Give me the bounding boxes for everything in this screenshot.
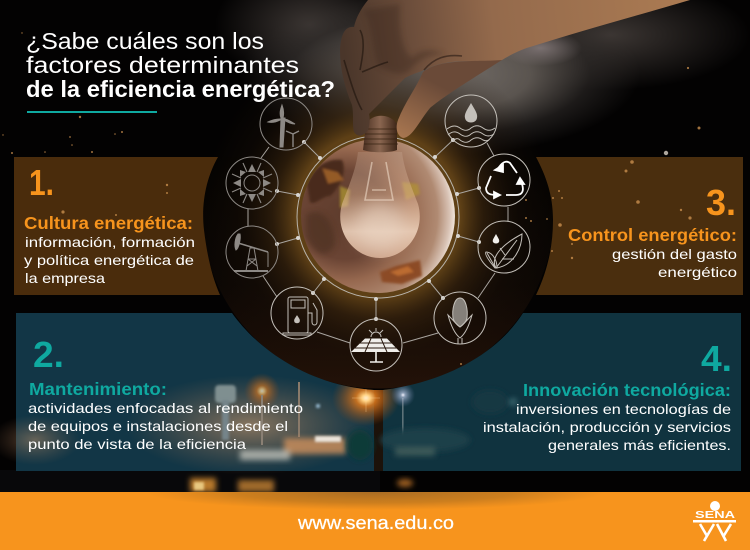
screw base bbox=[363, 116, 397, 152]
text: control energético: gestión del gasto bbox=[612, 246, 737, 262]
hand bbox=[340, 0, 690, 138]
bulb glass bbox=[340, 152, 420, 258]
panel 4 photo lights bbox=[380, 390, 517, 456]
heading: mantenimiento: Mantenimiento: bbox=[29, 379, 167, 399]
logo: SENA: SENA bbox=[695, 510, 735, 521]
heading: cultura energética: Cultura energética: bbox=[24, 213, 193, 233]
footer band bbox=[0, 492, 750, 550]
night lights photo bbox=[0, 390, 413, 492]
panel 4 bbox=[380, 313, 741, 471]
logo: SENA bbox=[693, 501, 736, 541]
number 4: 4. bbox=[701, 338, 732, 379]
text: cultura energética: y política energética de bbox=[24, 252, 194, 268]
icon: leaf and drop bbox=[478, 221, 530, 273]
text: innovación tecnológica: inversiones en tecnologías de bbox=[516, 401, 731, 417]
title bbox=[26, 28, 335, 102]
text: cultura energética bbox=[24, 234, 195, 286]
icon: oil pumpjack bbox=[226, 226, 278, 278]
panel 3 bbox=[536, 157, 743, 295]
icon: recycle arrows bbox=[478, 154, 530, 206]
icon: water drop and waves bbox=[445, 95, 497, 147]
icon: sun bbox=[226, 157, 278, 209]
globe with light bulb bbox=[297, 116, 459, 298]
continents bbox=[306, 160, 422, 284]
text: cultura energética: la empresa bbox=[25, 270, 105, 286]
icon: corn bbox=[434, 292, 486, 344]
outer ring bbox=[297, 136, 459, 298]
text: mantenimiento: de equipos e instalaciones desde el bbox=[28, 418, 288, 434]
arm and palm bbox=[340, 0, 690, 136]
text: innovación tecnológica: instalación, producción y servicios bbox=[483, 419, 731, 435]
filament bbox=[365, 162, 393, 200]
big dark circle bbox=[202, 38, 554, 390]
number 1: 1. bbox=[29, 162, 54, 203]
heading: control energético: Control energético: bbox=[568, 225, 737, 245]
icon: fuel pump bbox=[271, 287, 323, 339]
text: mantenimiento: actividades enfocadas al rendimiento bbox=[28, 400, 303, 416]
inner glow bbox=[356, 202, 404, 250]
title: factores determinantes bbox=[26, 52, 299, 78]
title: ¿Sabe cuáles son los bbox=[26, 28, 264, 54]
connector lines bbox=[248, 138, 508, 343]
website url: www.sena.edu.co bbox=[297, 513, 454, 533]
icon: wind turbines bbox=[260, 98, 312, 150]
particles bbox=[2, 32, 701, 365]
thumb bbox=[397, 60, 502, 138]
text: control energético bbox=[612, 246, 737, 280]
text: innovación tecnológica bbox=[483, 401, 731, 453]
street lamps bbox=[334, 384, 414, 424]
text: cultura energética: información, formación bbox=[25, 234, 195, 250]
text: mantenimiento bbox=[28, 400, 303, 452]
text: mantenimiento: punto de vista de la eficiencia bbox=[28, 436, 246, 452]
number 2: 2. bbox=[33, 334, 64, 375]
globe bbox=[301, 139, 455, 293]
number 3: 3. bbox=[706, 182, 736, 223]
heading: innovación tecnológica: Innovación tecnológica: bbox=[523, 380, 731, 400]
title: de la eficiencia energética? bbox=[26, 76, 335, 102]
title underline bbox=[27, 111, 157, 113]
palm shading bbox=[362, 4, 446, 74]
panel 2 bbox=[0, 313, 375, 475]
panel 1 bbox=[14, 157, 220, 295]
icon: solar panel bbox=[350, 319, 402, 371]
text: innovación tecnológica: generales más eficientes. bbox=[548, 437, 731, 453]
text: control energético: energético bbox=[658, 264, 737, 280]
panel 2 photo lights bbox=[0, 373, 375, 475]
